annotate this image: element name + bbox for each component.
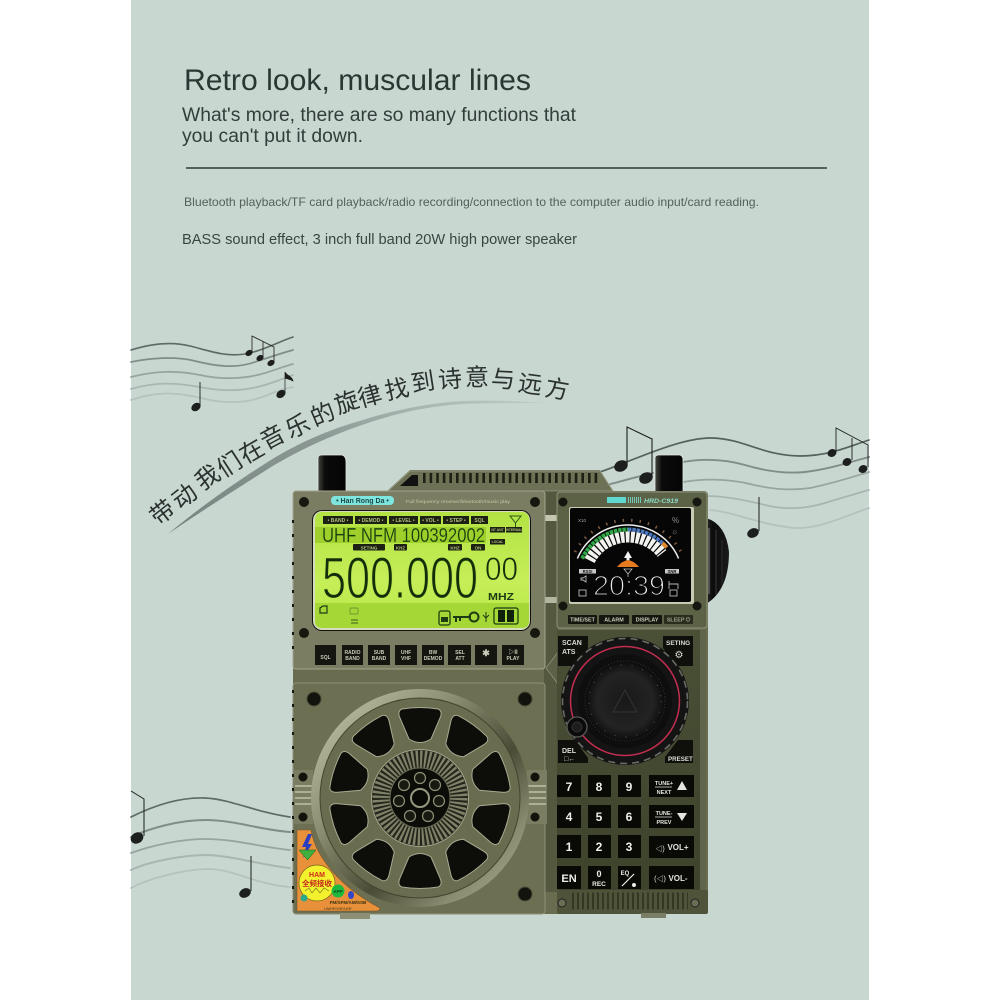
meter labels: SNR <box>668 569 676 574</box>
signal meter screen: X10 <box>578 518 587 523</box>
meter clock: 20:39 <box>593 570 665 601</box>
side tuning knob <box>706 518 729 604</box>
lcd top labels: • STEP • <box>446 518 466 524</box>
curved slogan: 到 <box>409 368 437 398</box>
ham sticker: FM/SFM/AM/SSB <box>330 900 367 905</box>
tune and volume keys: TUNE- <box>656 811 673 817</box>
music staff: top left <box>131 337 293 402</box>
curved slogan: 诗 <box>437 366 463 394</box>
curved slogan: 们 <box>213 447 247 483</box>
music notes: top left <box>190 336 293 413</box>
ham sticker: 全频接收 <box>302 878 332 888</box>
lcd panel <box>293 491 545 669</box>
button row: RADIO <box>344 650 361 656</box>
curved slogan: 找 <box>382 374 412 406</box>
numeric keypad: 8 <box>596 780 603 794</box>
button row: BAND <box>345 656 360 662</box>
gauge needle <box>617 551 639 577</box>
lcd top labels: • LEVEL • <box>392 518 415 524</box>
curved slogan: 带 <box>145 495 181 531</box>
antennas <box>318 455 683 492</box>
speaker grille windows <box>327 708 513 888</box>
curved slogan: 旋 <box>331 386 363 420</box>
numeric keypad: 6 <box>626 810 633 824</box>
tune and volume keys: PREV <box>657 820 672 826</box>
tune and volume keys: (◁) <box>654 875 666 883</box>
signal meter screen <box>569 507 694 604</box>
tune and volume keys: VOL+ <box>667 843 689 852</box>
numeric keypad <box>557 775 641 889</box>
lcd top labels <box>323 516 488 524</box>
keys around dial: DEL <box>562 748 577 755</box>
numeric keypad: EQ <box>621 871 630 877</box>
curved slogan: 远 <box>516 370 544 400</box>
brand badge <box>331 496 394 505</box>
keys around dial: ⚙ <box>675 650 684 661</box>
music notes: bottom left <box>129 791 252 900</box>
subtitle: you can't put it down. <box>182 126 363 147</box>
tuning dial <box>561 637 689 765</box>
function list text: Bluetooth playback/TF card playback/radio recording/connection to the computer audio input/card reading. <box>184 195 759 209</box>
left edge notches <box>292 520 294 905</box>
numeric keypad: 4 <box>566 810 573 824</box>
curved slogan: 我 <box>190 460 226 496</box>
music notes: top right <box>612 427 869 540</box>
music staff: top right <box>600 438 869 528</box>
numeric keypad: 9 <box>626 780 633 794</box>
tune and volume keys: ◁) <box>655 845 665 853</box>
tuning panel <box>557 630 708 918</box>
subtitle <box>182 105 577 147</box>
ham sticker <box>297 830 380 911</box>
display function buttons: ALARM <box>604 618 624 624</box>
side lugs <box>294 770 547 824</box>
button row: ✱ <box>482 648 490 658</box>
music staff: bottom left <box>131 798 290 888</box>
radio <box>293 455 729 919</box>
curved slogan: 乐 <box>281 410 315 444</box>
curved slogan: 的 <box>307 398 339 432</box>
curved slogan <box>145 364 571 531</box>
keys around dial: □← <box>564 756 575 763</box>
bottom rib strip <box>557 890 708 918</box>
numeric keypad: 1 <box>566 840 573 854</box>
button row: DEMOD <box>424 656 443 662</box>
numeric keypad: REC <box>592 881 606 888</box>
curved slogan: 音 <box>256 420 290 456</box>
curved slogan: 律 <box>355 381 385 413</box>
lcd screen <box>312 510 531 631</box>
curved slogan: 与 <box>490 366 516 394</box>
keys around dial: SCAN <box>562 640 582 647</box>
speaker description: BASS sound effect, 3 inch full band 20W high power speaker <box>182 232 577 248</box>
button row: VHF <box>401 656 411 662</box>
lcd screen: LOCAL <box>492 540 503 544</box>
ham sticker: LW/HF/VHF/UHF <box>324 907 353 911</box>
lcd small labels: ON <box>475 546 481 550</box>
lcd top labels: • VOL • <box>422 518 439 524</box>
center column with light bars <box>544 492 558 892</box>
keys around dial <box>558 636 693 763</box>
curved slogan: 方 <box>543 375 571 405</box>
button row: ATT <box>455 656 465 662</box>
icon: lcd antenna <box>510 516 521 528</box>
signal meter screen: ☼ <box>671 527 678 536</box>
tagline: Full frequency receiver/bluetooth/music play <box>406 499 511 504</box>
lcd status icons <box>320 606 518 625</box>
numeric keypad: 2 <box>596 840 603 854</box>
top handle <box>386 470 614 492</box>
swoosh under slogan <box>168 401 545 534</box>
display function buttons: DISPLAY <box>636 618 659 624</box>
display function buttons: TIME/SET <box>570 618 596 624</box>
tune and volume keys: VOL- <box>668 874 688 883</box>
meter labels: RSSI <box>583 569 592 574</box>
signal meter screen: % <box>672 516 679 525</box>
numeric keypad: 7 <box>566 780 573 794</box>
lcd small labels: SETING <box>361 546 378 550</box>
curved slogan: 意 <box>465 364 489 392</box>
model name: HRD-C919 <box>644 498 678 505</box>
numeric keypad: 3 <box>626 840 633 854</box>
speaker panel <box>293 683 547 919</box>
curved slogan: 在 <box>235 434 269 470</box>
button row: UHF <box>401 650 411 656</box>
gauge <box>575 520 681 560</box>
display function buttons <box>568 615 693 624</box>
model name <box>607 497 678 505</box>
button row: PLAY <box>507 656 520 662</box>
speaker bezel <box>311 689 529 907</box>
right display panel <box>557 492 707 628</box>
title: Retro look, muscular lines <box>184 64 531 97</box>
tune and volume keys: NEXT <box>657 790 672 796</box>
curved slogan: 动 <box>167 479 203 515</box>
lcd small labels <box>353 544 485 550</box>
ham sticker: APP <box>333 889 343 894</box>
page background panel <box>131 0 869 1000</box>
lcd small labels: KHZ <box>396 546 405 550</box>
radio body base <box>293 491 708 914</box>
keys around dial: SETING <box>666 640 690 647</box>
lcd screen: 00 <box>485 551 518 587</box>
numeric keypad: EN <box>561 873 577 885</box>
lcd screen: NT ANT <box>491 528 505 532</box>
button row: BW <box>429 650 437 656</box>
meter icons <box>579 576 678 596</box>
keys around dial: PRESET <box>668 756 693 763</box>
lcd screen: MHZ <box>488 591 515 603</box>
brand badge: • Han Rong Da • <box>336 498 389 505</box>
lcd top labels: • DEMOD • <box>359 518 384 524</box>
tune and volume keys <box>649 775 694 889</box>
lcd top labels: • BAND • <box>328 518 349 524</box>
lcd main frequency: 500.000 <box>322 546 478 611</box>
ham sticker: HAM <box>309 872 325 879</box>
button row: ▷II <box>508 649 518 656</box>
button row: SEL <box>455 650 465 656</box>
subtitle: What's more, there are so many functions that <box>182 105 577 126</box>
meter labels <box>579 569 679 574</box>
button row: SQL <box>320 655 331 661</box>
numeric keypad: 0 <box>596 869 602 879</box>
numeric keypad: 5 <box>596 810 603 824</box>
lcd top labels: SQL <box>474 518 485 524</box>
button row: BAND <box>372 656 387 662</box>
button row <box>315 645 524 665</box>
display function buttons: SLEEP ⏻ <box>667 616 691 624</box>
lcd frequency row: UHF NFM 100392002 <box>322 525 485 547</box>
speaker hub <box>372 750 468 846</box>
button row: SUB <box>374 650 385 656</box>
tune and volume keys: TUNE+ <box>655 781 673 787</box>
lcd small labels: KHZ <box>450 546 460 550</box>
lcd screen: INTERNAL <box>505 528 523 532</box>
keys around dial: ATS <box>562 649 576 656</box>
